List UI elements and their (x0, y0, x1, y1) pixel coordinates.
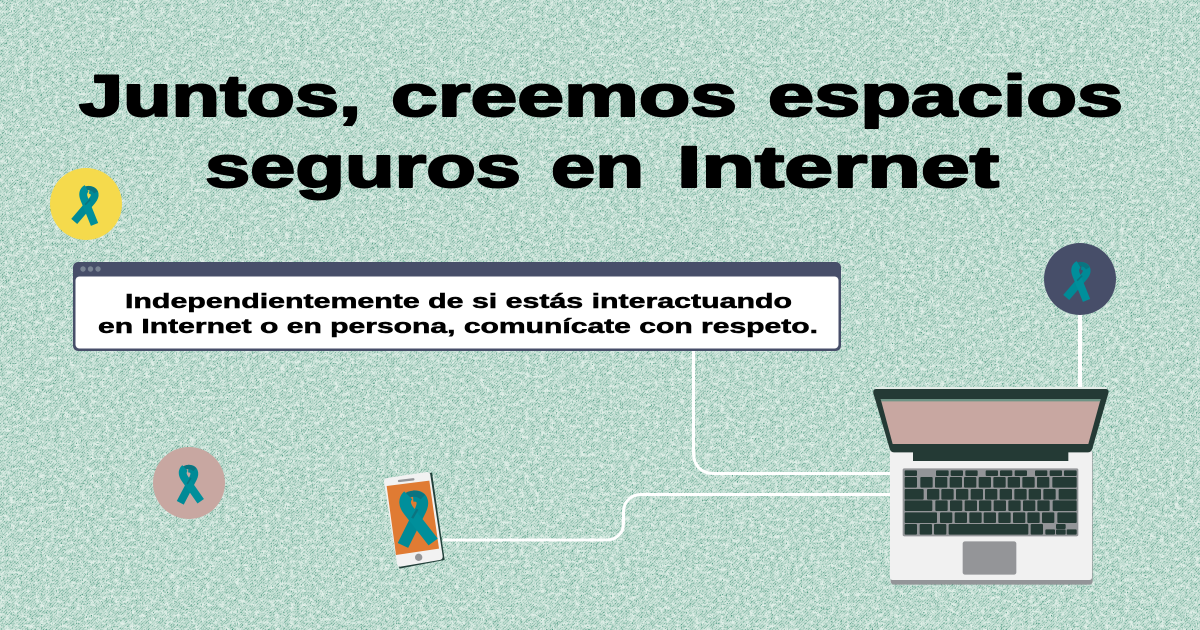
connector line: message box to laptop (694, 349, 892, 474)
title: creemos (391, 64, 737, 129)
laptop base (890, 450, 1093, 585)
message text: en Internet o en persona, comunícate con respeto. (98, 316, 818, 338)
title: en (551, 135, 644, 200)
icon: smartphone with ribbon (384, 472, 445, 569)
laptop lid and screen (873, 388, 1109, 461)
title: Internet (677, 135, 999, 200)
icon: yellow ribbon badge (50, 168, 122, 240)
icon: laptop (873, 388, 1109, 585)
trackpad (963, 541, 1016, 575)
connector line: phone to laptop (443, 494, 892, 540)
title (79, 64, 1123, 200)
title: seguros (205, 135, 521, 200)
icon: navy ribbon badge (1044, 243, 1116, 315)
title: espacios (768, 64, 1123, 129)
panel: browser-style message box (73, 262, 841, 351)
title: Juntos, (79, 64, 361, 129)
connector line: navy badge to laptop (1078, 312, 1082, 392)
icon: rose ribbon badge (153, 447, 225, 519)
keyboard (903, 468, 1078, 536)
message text: Independientemente de si estás interactuando (125, 291, 792, 313)
message text (98, 291, 818, 338)
